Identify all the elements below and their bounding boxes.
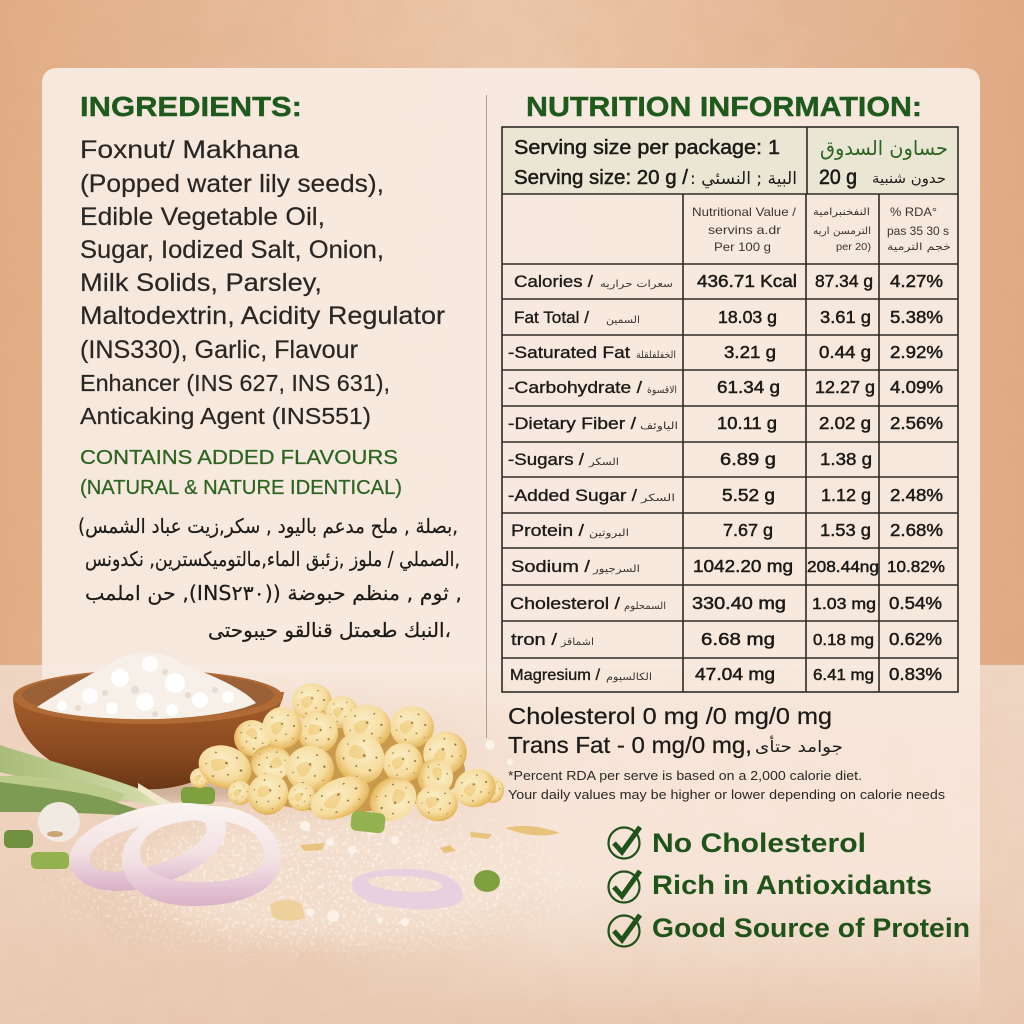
row: magnesium <box>510 664 942 684</box>
small onion ring <box>352 869 463 909</box>
row: calories: 4.27% <box>890 271 943 291</box>
ingredients heading: INGREDIENTS: <box>80 91 302 122</box>
serving size: 20 g <box>819 166 857 189</box>
arabic ingredients: النبك طعمتل قنالقو حيبوحتى، <box>208 618 451 642</box>
column divider <box>486 95 488 738</box>
row: fat total: 18.03 g <box>718 307 777 327</box>
check icon <box>608 871 640 902</box>
ingredients list <box>80 136 445 429</box>
serving size: حدون شنبية <box>872 171 946 187</box>
arabic ingredients <box>78 514 462 642</box>
background wall <box>0 0 1024 668</box>
ingredients list: Foxnut/ Makhana <box>80 136 299 164</box>
row: magnesium: Magresium / <box>510 667 601 684</box>
column headers: Nutritional Value / <box>692 205 797 219</box>
row: sodium: Sodium / <box>511 557 590 576</box>
ingredients list: (INS330), Garlic, Flavour <box>80 336 358 364</box>
column headers: Per 100 g <box>714 240 771 254</box>
bowl shadow <box>45 780 275 800</box>
background texture <box>0 0 1024 668</box>
row: sodium: 208.44ng <box>807 559 879 576</box>
row: iron <box>511 629 942 649</box>
arabic ingredients: الصملي / ملوز ,زئبق الماء,مالتوميكسترين, نكدونس, <box>85 547 460 572</box>
row: magnesium: الكالسيوم <box>606 672 652 683</box>
row: saturated fat: الخفلفلقلة <box>636 350 676 361</box>
benefit: no cholesterol: No Cholesterol <box>652 828 866 858</box>
column headers: النفخنبرامية <box>813 207 870 218</box>
green onion stalks <box>0 745 175 817</box>
popped foxnuts <box>190 683 504 829</box>
row: carbohydrate: 61.34 g <box>717 377 780 397</box>
green onion pieces <box>4 787 500 892</box>
row: cholesterol: 0.54% <box>889 593 942 613</box>
bowl rim <box>13 670 283 724</box>
row: fat total: السمين <box>606 315 640 326</box>
row: iron: 0.18 mg <box>813 632 874 649</box>
cholesterol and trans fat note <box>508 703 843 758</box>
row: protein: 7.67 g <box>723 520 773 540</box>
row: dietary fiber: 10.11 g <box>717 413 777 433</box>
onion rings <box>70 803 463 909</box>
RDA footnote <box>508 768 946 802</box>
row: dietary fiber: -Dietary Fiber / <box>508 414 636 433</box>
row: magnesium: 47.04 mg <box>695 664 775 684</box>
row: calories: 436.71 Kcal <box>697 271 797 291</box>
row: cholesterol: السمحلوم <box>624 601 666 612</box>
row: sugars: السكر <box>588 457 619 468</box>
nutrition table <box>502 127 958 692</box>
cholesterol and trans fat note: Cholesterol 0 mg /0 mg/0 mg <box>508 703 832 729</box>
row: cholesterol: Cholesterol / <box>510 594 620 613</box>
RDA footnote: *Percent RDA per serve is based on a 2,000 calorie diet. <box>508 768 862 783</box>
panel blend into tabletop <box>42 668 980 738</box>
ingredients list: (Popped water lily seeds), <box>80 170 384 198</box>
serving size <box>514 136 948 189</box>
tabletop texture <box>0 665 1024 1024</box>
row: fat total: 3.61 g <box>820 307 871 327</box>
row: iron: 0.62% <box>889 629 942 649</box>
bowl inner <box>22 672 274 718</box>
content panel lower fade <box>407 696 980 992</box>
row: sodium <box>511 556 945 576</box>
serving size: حساون السدوق <box>820 136 948 160</box>
front onion ring <box>122 806 281 906</box>
row: dietary fiber: 2.02 g <box>819 413 871 433</box>
wooden bowl of rice <box>13 652 284 800</box>
benefit: rich in antioxidants: Rich in Antioxidants <box>652 870 932 900</box>
flavour statement <box>80 446 402 499</box>
benefit: good source of protein: Good Source of Protein <box>652 913 970 943</box>
row: added sugar: -Added Sugar / <box>508 486 637 505</box>
column headers: الترمسن اريه <box>813 226 871 237</box>
row: protein: 2.68% <box>890 520 943 540</box>
ingredients list: Milk Solids, Parsley, <box>80 269 322 297</box>
arabic ingredients: (بصلة , ملح مدعم باليود , سكر,زيت عباد الشمس, <box>78 514 458 538</box>
row: cholesterol <box>510 593 942 613</box>
column headers <box>692 205 951 254</box>
row: iron: tron / <box>511 630 557 649</box>
row: protein <box>511 520 943 540</box>
row: carbohydrate: 12.27 g <box>815 377 875 397</box>
row: calories <box>514 271 943 291</box>
row: carbohydrate: 4.09% <box>890 377 943 397</box>
row: fat total: 5.38% <box>890 307 943 327</box>
back onion ring <box>70 803 226 891</box>
row: dietary fiber <box>508 413 943 433</box>
content panel <box>42 68 980 668</box>
ingredients list: Edible Vegetable Oil, <box>80 203 325 231</box>
ingredients list: Enhancer (INS 627, INS 631), <box>80 370 390 396</box>
row: calories: 87.34 g <box>815 271 873 291</box>
row: sodium: 1042.20 mg <box>693 556 793 576</box>
ingredients list: Anticaking Agent (INS551) <box>80 403 371 429</box>
flavour statement: CONTAINS ADDED FLAVOURS <box>80 446 398 469</box>
row: sugars: 1.38 g <box>820 449 872 469</box>
row: dietary fiber: الياوئف <box>640 421 678 432</box>
table header band <box>502 127 958 194</box>
row: sodium: السرجيور <box>592 564 640 575</box>
column headers: servins a.dr <box>708 223 781 237</box>
serving size: Serving size: 20 g / <box>514 166 688 189</box>
table grid <box>502 127 958 692</box>
flavour statement: (NATURAL & NATURE IDENTICAL) <box>80 476 402 499</box>
row: saturated fat: -Saturated Fat <box>508 343 630 362</box>
row: calories: Calories / <box>514 272 593 291</box>
column headers: pas 35 30 s <box>887 224 949 238</box>
row: saturated fat: 2.92% <box>890 342 943 362</box>
row: cholesterol: 330.40 mg <box>692 593 786 613</box>
row: carbohydrate: -Carbohydrate / <box>508 378 642 397</box>
row: sodium: 10.82% <box>887 559 945 576</box>
green onion piece front <box>350 810 386 834</box>
row: iron: اشماقز <box>560 637 594 648</box>
ingredients list: Sugar, Iodized Salt, Onion, <box>80 236 384 264</box>
row: saturated fat: 3.21 g <box>724 342 776 362</box>
row: fat total <box>514 307 943 327</box>
tabletop surface <box>0 665 1024 1024</box>
rice mound <box>37 652 256 719</box>
row: added sugar <box>508 485 943 505</box>
row: protein: البروتين <box>589 528 629 539</box>
column headers: خجم الترمية <box>887 242 951 253</box>
row: dietary fiber: 2.56% <box>890 413 943 433</box>
row: sugars: 6.89 g <box>720 449 776 469</box>
row: added sugar: 1.12 g <box>821 485 871 505</box>
row: calories: سعرات حراريه <box>600 279 673 290</box>
cholesterol and trans fat note: جوامد حتأى <box>755 735 843 757</box>
pile base <box>225 728 465 812</box>
row: saturated fat: 0.44 g <box>819 342 871 362</box>
check icon <box>608 915 640 946</box>
cholesterol and trans fat note: Trans Fat - 0 mg/0 mg, <box>508 732 752 758</box>
row: carbohydrate <box>508 377 943 397</box>
row: magnesium: 6.41 mg <box>813 667 874 684</box>
ingredients list: Maltodextrin, Acidity Regulator <box>80 302 445 330</box>
row: carbohydrate: الاقسوة <box>647 385 677 396</box>
row: protein: Protein / <box>511 521 584 540</box>
row: cholesterol: 1.03 mg <box>812 596 876 613</box>
serving size: : البية ; النسئي <box>690 169 797 189</box>
row: added sugar: 2.48% <box>890 485 943 505</box>
row: added sugar: السكر <box>640 493 675 504</box>
nutrition heading: NUTRITION INFORMATION: <box>526 91 922 122</box>
row: iron: 6.68 mg <box>701 629 775 649</box>
column headers: per 20) <box>836 242 871 253</box>
bowl body <box>13 692 284 789</box>
row: sugars <box>508 449 872 469</box>
ingredients column <box>78 91 462 642</box>
garlic clove <box>38 802 80 842</box>
row: magnesium: 0.83% <box>889 664 942 684</box>
check icon <box>608 827 640 858</box>
serving size: Serving size per package: 1 <box>514 136 780 159</box>
row: protein: 1.53 g <box>820 520 871 540</box>
row: saturated fat <box>508 342 943 362</box>
row: added sugar: 5.52 g <box>722 485 775 505</box>
row: fat total: Fat Total / <box>514 308 589 327</box>
floor crumbs <box>41 740 566 960</box>
arabic ingredients: حن املمب ,(INS٢٣٠)) ثوم , منظم حبوضة , <box>85 581 462 605</box>
column headers: % RDA° <box>890 205 937 219</box>
RDA footnote: Your daily values may be higher or lower depending on calorie needs <box>508 787 946 802</box>
row: sugars: -Sugars / <box>508 450 584 469</box>
